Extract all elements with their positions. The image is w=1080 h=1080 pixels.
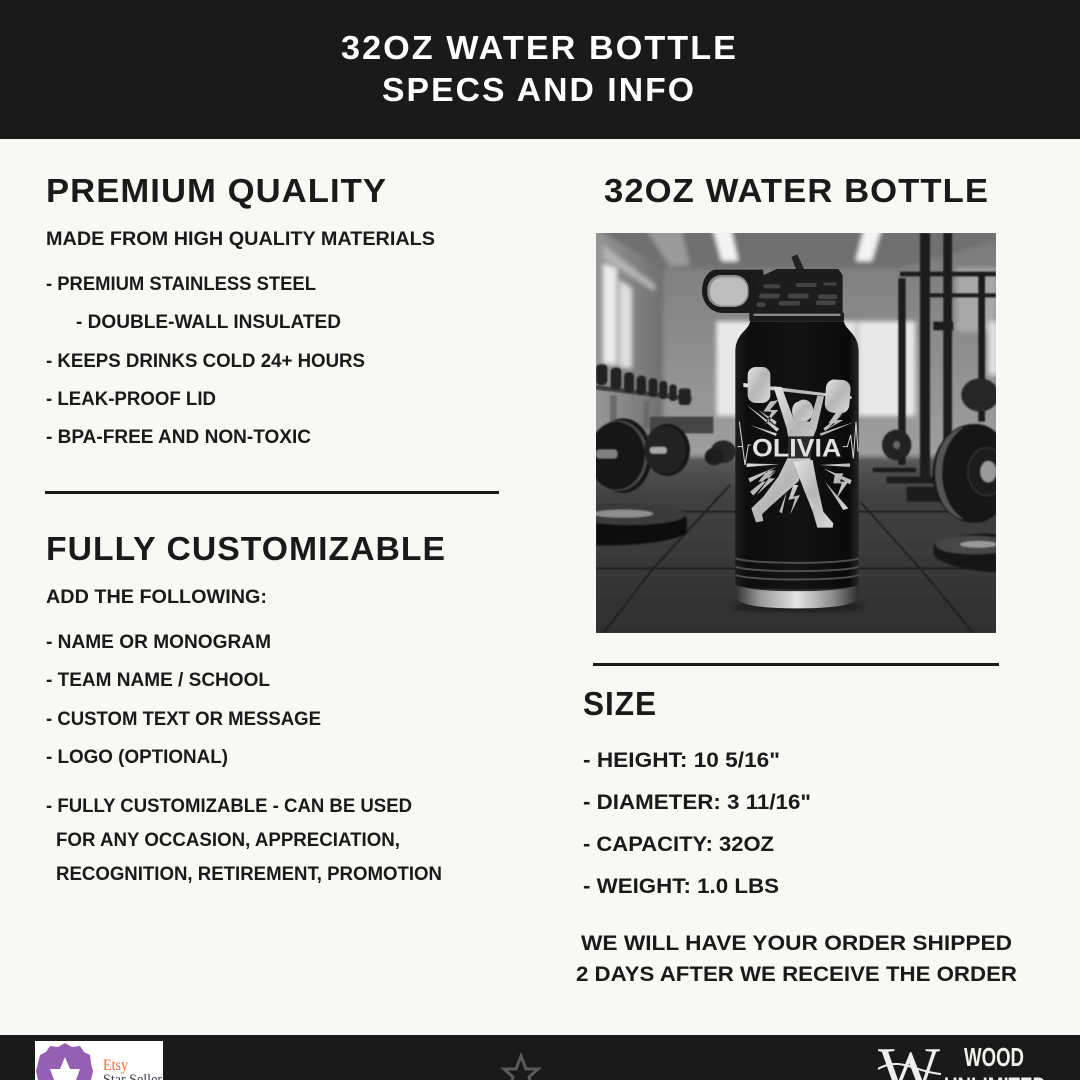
- heading: fully customizable: FULLY CUSTOMIZABLE: [46, 530, 446, 567]
- list: custom options: - LOGO (OPTIONAL): [46, 747, 228, 768]
- list: features: [46, 274, 365, 448]
- centre window: [717, 322, 915, 416]
- straw tip: [791, 254, 804, 269]
- logo: wood unlimited: WOOD: [964, 1042, 1024, 1072]
- icon: purple scalloped star badge: [36, 1043, 93, 1080]
- list: custom options: - CUSTOM TEXT OR MESSAGE: [46, 709, 321, 730]
- flat plate right: [933, 534, 996, 572]
- title line 2: SPECS AND INFO: [382, 71, 696, 108]
- left barbell plates: [574, 418, 1014, 572]
- right rack: [873, 233, 999, 502]
- right leg: [793, 460, 833, 528]
- intro: materials: MADE FROM HIGH QUALITY MATERIALS: [46, 229, 435, 250]
- neck ring: [749, 312, 844, 322]
- header banner: [0, 0, 1080, 139]
- text block: occasions: FOR ANY OCCASION, APPRECIATION,: [56, 830, 400, 851]
- engraving: weightlifter: [743, 367, 855, 528]
- text block: occasions: - FULLY CUSTOMIZABLE - CAN BE USED: [46, 796, 412, 817]
- list: dimensions: - HEIGHT: 10 5/16": [583, 749, 780, 772]
- background blurred: [590, 225, 1003, 637]
- ridges: [736, 558, 859, 579]
- list: custom options: - TEAM NAME / SCHOOL: [46, 670, 270, 691]
- list: features: - KEEPS DRINKS COLD 24+ HOURS: [46, 351, 365, 372]
- heading: product name: 32OZ WATER BOTTLE: [604, 172, 989, 209]
- title line 1: 32OZ WATER BOTTLE: [341, 29, 738, 66]
- steel base: [738, 586, 855, 608]
- list: features: - LEAK-PROOF LID: [46, 389, 216, 410]
- lid: [756, 269, 843, 313]
- intro: add the following: ADD THE FOLLOWING:: [46, 587, 267, 608]
- list: features: - DOUBLE-WALL INSULATED: [76, 312, 341, 333]
- list: custom options: - NAME OR MONOGRAM: [46, 632, 271, 653]
- head and ponytail: [792, 400, 813, 422]
- engraved name: OLIVIA: [752, 435, 841, 463]
- panel: size: [583, 685, 811, 898]
- arms and torso: [773, 386, 824, 465]
- icon: star outline: [504, 1056, 538, 1080]
- shipping note: 2 DAYS AFTER WE RECEIVE THE ORDER: [576, 963, 1017, 986]
- left windows: [603, 263, 617, 365]
- badge: etsy star seller: Etsy: [103, 1057, 128, 1074]
- panel: premium quality: [46, 172, 435, 448]
- heading: premium quality: PREMIUM QUALITY: [46, 172, 387, 209]
- floor: [590, 457, 1003, 637]
- body: [735, 322, 859, 589]
- list: dimensions: [583, 749, 811, 898]
- floor tile lines: [596, 485, 996, 633]
- shadow: [731, 601, 864, 612]
- bottle: [702, 254, 864, 612]
- list: features: - PREMIUM STAINLESS STEEL: [46, 274, 316, 295]
- list: dimensions: - DIAMETER: 3 11/16": [583, 791, 811, 814]
- flat plate left: [596, 504, 687, 545]
- list: dimensions: - CAPACITY: 32OZ: [583, 833, 774, 856]
- heartbeat lines: [737, 422, 858, 465]
- shipping note: [576, 932, 1017, 986]
- list: dimensions: - WEIGHT: 1.0 LBS: [583, 875, 779, 898]
- footer bar: [0, 1034, 1080, 1080]
- heading: size: SIZE: [583, 685, 657, 722]
- left leg: [751, 458, 807, 522]
- text block: occasions: RECOGNITION, RETIREMENT, PROMOTION: [56, 864, 442, 885]
- badge: etsy star seller: [35, 1041, 163, 1080]
- rays: [747, 400, 779, 436]
- right big plate: [933, 424, 1014, 523]
- shipping note: WE WILL HAVE YOUR ORDER SHIPPED: [581, 932, 1012, 955]
- lid handle: [702, 270, 763, 313]
- list: custom options: [46, 632, 321, 768]
- text block: occasions: [46, 796, 442, 885]
- panel: fully customizable: [46, 530, 446, 885]
- dumbbell rack: [595, 364, 736, 465]
- list: features: - BPA-FREE AND NON-TOXIC: [46, 427, 311, 448]
- product photo: engraved bottle in gym: [596, 233, 996, 633]
- logo: wood unlimited: [878, 1048, 1044, 1080]
- name plate: [751, 436, 843, 458]
- barbell: [743, 383, 852, 399]
